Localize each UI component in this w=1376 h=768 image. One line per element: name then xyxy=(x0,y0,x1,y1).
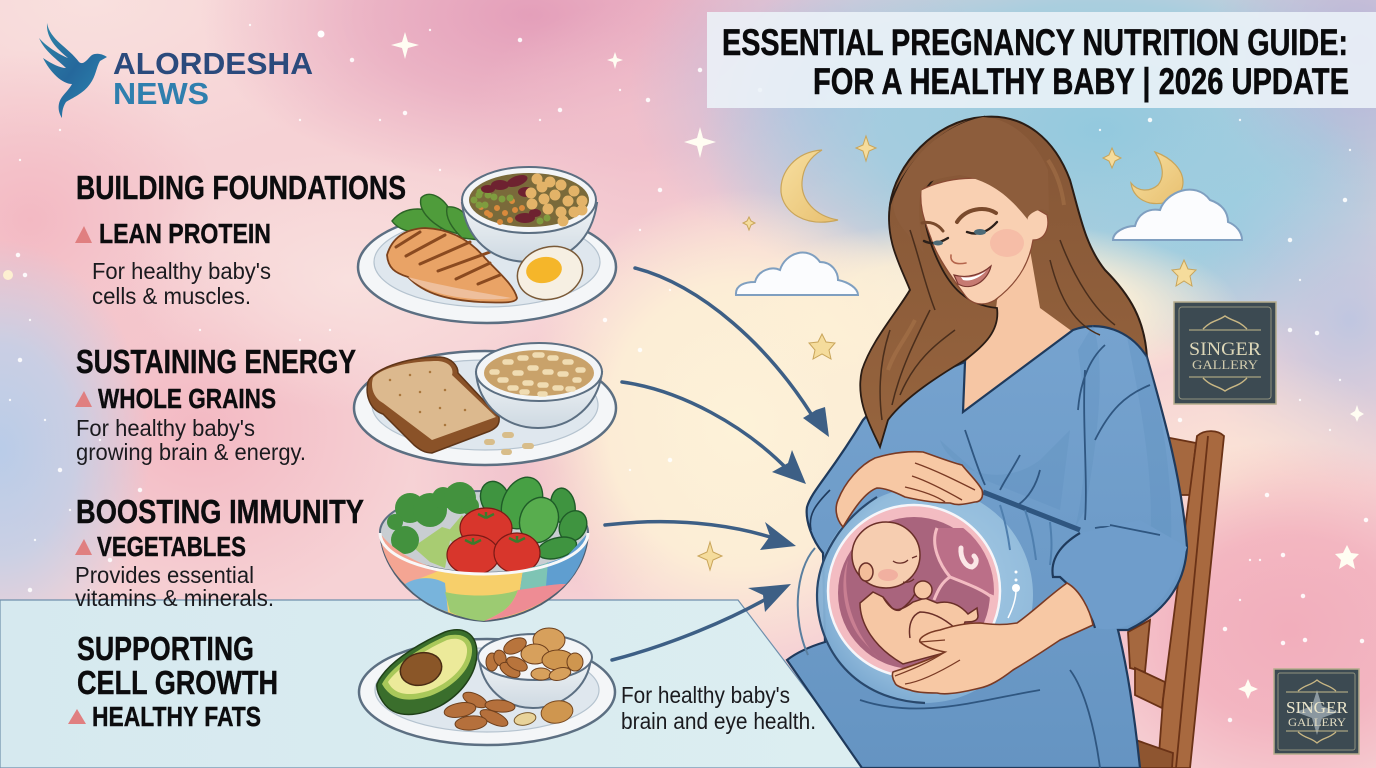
watermark: singer gallery top: GALLERY xyxy=(1192,357,1259,372)
almonds and walnuts in bowl xyxy=(486,628,583,683)
womb xyxy=(828,505,1000,677)
panel: bottom-left pale blue table xyxy=(0,600,866,768)
section: sustaining energy text: WHOLE GRAINS xyxy=(98,383,276,414)
face xyxy=(921,178,1048,304)
section: supporting cell growth text xyxy=(68,630,278,732)
woman xyxy=(787,117,1187,768)
hair top xyxy=(893,117,1049,255)
nut bowl xyxy=(479,658,591,708)
tomatoes xyxy=(447,508,540,575)
section: boosting immunity text xyxy=(75,493,364,611)
plate: whole grains xyxy=(354,343,616,465)
hair strands xyxy=(880,230,1115,420)
lower hand and forearm xyxy=(892,583,1093,694)
section: supporting cell growth text: CELL GROWTH xyxy=(77,664,278,701)
lower hand finger lines xyxy=(895,640,960,684)
eyes, brows and smile xyxy=(922,209,997,287)
gold stars xyxy=(698,136,1196,570)
leaves xyxy=(392,194,480,240)
rainbow bowl body xyxy=(380,533,588,621)
placenta xyxy=(934,528,1000,600)
section: building foundations text: For healthy baby's xyxy=(92,258,271,284)
upper hand finger lines xyxy=(905,463,975,502)
egg xyxy=(511,239,589,307)
section: building foundations text xyxy=(75,169,406,309)
avocado xyxy=(377,630,477,714)
section: boosting immunity text: VEGETABLES xyxy=(97,531,246,562)
arrow 3 xyxy=(605,522,796,550)
text: brain and eye health: For healthy baby's xyxy=(621,682,790,708)
left cuff xyxy=(810,490,830,530)
watermark: singer gallery bottom: GALLERY xyxy=(1288,715,1346,729)
arc beside belly xyxy=(798,548,815,655)
decorative stars and moons xyxy=(391,32,1364,699)
section: boosting immunity text: vitamins & minerals. xyxy=(75,585,274,611)
dress body xyxy=(787,326,1187,768)
title panel xyxy=(707,12,1376,108)
watermark: singer gallery top xyxy=(1174,302,1276,404)
white sparkles xyxy=(391,32,1364,699)
sleeve crease xyxy=(1110,525,1160,535)
belly motion dots xyxy=(1008,572,1020,618)
logo wordmark xyxy=(113,46,313,111)
chicken xyxy=(387,228,517,303)
section: boosting immunity text: BOOSTING IMMUNITY xyxy=(76,493,364,530)
baby xyxy=(852,522,978,664)
right sleeve cuff xyxy=(1052,520,1187,629)
section: sustaining energy text: SUSTAINING ENERGY xyxy=(76,343,356,380)
logo wordmark: NEWS xyxy=(113,76,209,111)
hair back xyxy=(864,117,1147,445)
section: supporting cell growth text: HEALTHY FATS xyxy=(92,701,261,732)
dress shading xyxy=(940,325,1171,560)
loose oats xyxy=(487,435,531,452)
section: boosting immunity text: Provides essential xyxy=(75,562,254,588)
belly xyxy=(817,487,1033,703)
cloud right xyxy=(1113,190,1242,240)
bowl: vegetables xyxy=(380,470,592,621)
logo wordmark: ALORDESHA xyxy=(113,46,313,81)
bowl of legumes xyxy=(462,203,597,262)
toast xyxy=(367,357,499,453)
plate: lean protein xyxy=(358,167,616,323)
watermark: singer gallery bottom: SINGER xyxy=(1286,698,1349,717)
broccoli xyxy=(387,482,479,568)
logo: Alordesha News xyxy=(39,23,313,118)
cheek xyxy=(990,229,1024,257)
cloud left xyxy=(736,253,858,295)
icon: bird xyxy=(39,23,107,118)
plate: healthy fats xyxy=(359,628,615,745)
section: sustaining energy text: growing brain & energy. xyxy=(76,439,306,465)
almonds on plate xyxy=(443,689,515,731)
dress folds xyxy=(860,345,1150,768)
section: building foundations text: BUILDING FOUNDATIONS xyxy=(76,169,406,206)
arrow 2 xyxy=(622,382,806,484)
section: sustaining energy text: For healthy baby's xyxy=(76,415,255,441)
hair highlight xyxy=(888,160,1064,370)
section: sustaining energy text xyxy=(75,343,356,465)
arrow 1 xyxy=(635,268,829,437)
waistband xyxy=(983,492,1080,530)
section: building foundations text: cells & muscles. xyxy=(92,283,251,309)
bowl back xyxy=(380,491,588,573)
chair xyxy=(1128,431,1224,768)
section: building foundations text: LEAN PROTEIN xyxy=(99,218,271,249)
hair front-left lock xyxy=(860,117,997,447)
watermark: singer gallery top: SINGER xyxy=(1189,339,1261,360)
section: supporting cell growth text: SUPPORTING xyxy=(77,630,254,667)
watermark: singer gallery bottom xyxy=(1274,669,1359,754)
oat bowl xyxy=(476,372,602,428)
upper hand xyxy=(836,452,983,527)
neck and chest xyxy=(963,250,1073,412)
text: brain and eye health xyxy=(621,682,816,734)
text: brain and eye health: brain and eye health. xyxy=(621,708,816,734)
moon right xyxy=(1131,152,1183,204)
spinach xyxy=(476,470,592,563)
moon left xyxy=(781,150,838,222)
belly fold lines xyxy=(1000,505,1052,565)
arrow 4 xyxy=(612,584,791,660)
